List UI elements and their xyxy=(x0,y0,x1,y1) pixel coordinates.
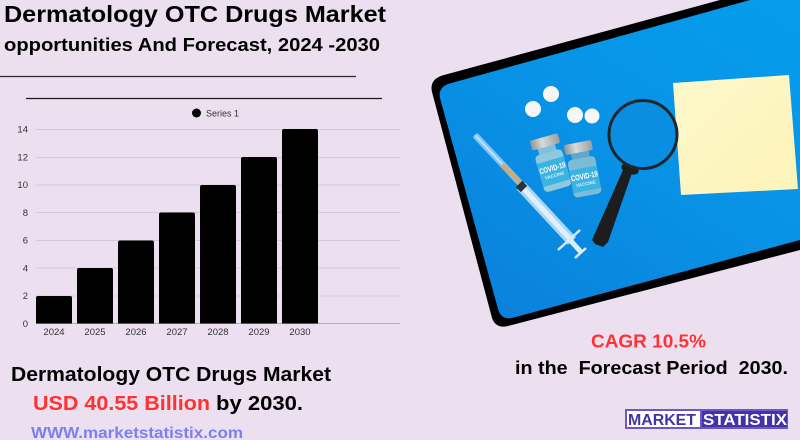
callout: market size xyxy=(11,363,331,415)
icon: vial right xyxy=(564,140,602,198)
y axis labels: 14 xyxy=(17,124,28,136)
x axis labels: 2029 xyxy=(248,327,270,338)
x axis labels: 2030 xyxy=(289,327,311,338)
bars xyxy=(36,129,318,324)
legend: Series 1 xyxy=(206,108,239,118)
title xyxy=(4,1,386,55)
logo xyxy=(625,409,788,429)
x axis labels: 2027 xyxy=(166,327,188,338)
callout: cagr xyxy=(515,332,788,378)
x axis labels: 2024 xyxy=(43,327,65,338)
y axis labels: 10 xyxy=(17,180,28,191)
logo second word: STATISTIX xyxy=(703,412,787,429)
y axis labels: 0 xyxy=(23,319,28,330)
y axis labels: 2 xyxy=(23,291,28,302)
x axis labels: 2025 xyxy=(84,327,106,338)
value suffix: by 2030. xyxy=(216,392,303,415)
icon: vial right: VACCINE xyxy=(576,179,596,188)
value in red: USD 40.55 Billion xyxy=(33,392,210,415)
subtitle: opportunities And Forecast, 2024 -2030 xyxy=(4,34,380,55)
icon: vial right: COVID-19 xyxy=(570,169,599,183)
icon: syringe xyxy=(475,135,586,258)
icon: magnifying glass xyxy=(592,100,677,247)
sticky note xyxy=(673,75,798,195)
icon: pills xyxy=(525,86,600,124)
y axis labels: 4 xyxy=(23,264,28,274)
x axis labels xyxy=(43,327,311,338)
logo: MARKET xyxy=(628,412,696,429)
icon: vial left xyxy=(530,133,572,193)
photo panel: medical flat lay xyxy=(432,0,800,327)
y axis labels: 12 xyxy=(17,152,28,164)
icon: vial left: VACCINE xyxy=(544,170,565,181)
forecast period text: in the Forecast Period 2030. xyxy=(515,358,788,378)
callout: market size: Dermatology OTC Drugs Market xyxy=(11,363,331,386)
y axis labels: 8 xyxy=(23,208,28,219)
bar chart xyxy=(17,108,400,338)
y axis labels: 6 xyxy=(23,236,28,246)
icon: vial left: COVID-19 xyxy=(538,160,567,176)
callout: cagr: CAGR 10.5% xyxy=(591,332,706,352)
y axis labels xyxy=(17,124,28,330)
x axis labels: 2028 xyxy=(207,327,229,338)
title: Dermatology OTC Drugs Market xyxy=(4,1,386,27)
x axis labels: 2026 xyxy=(125,327,147,338)
